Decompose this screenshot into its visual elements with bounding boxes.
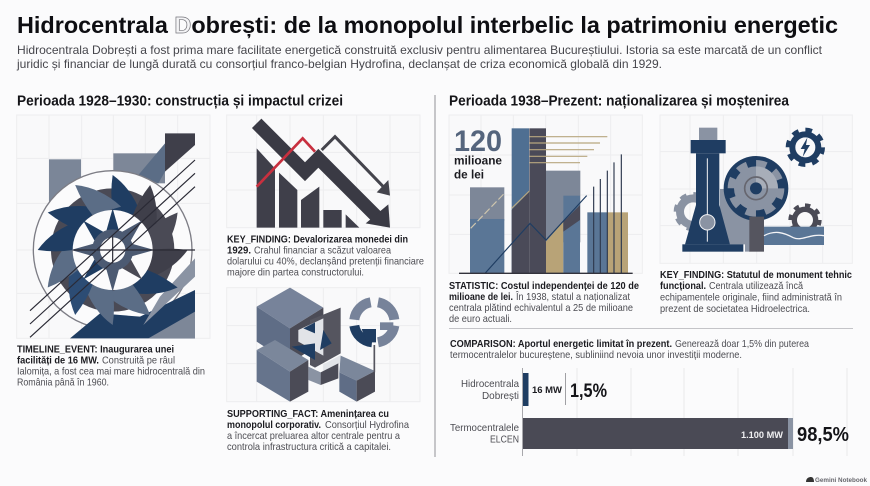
text: comparison: Generează doar 1,5% din puterea <box>675 339 809 350</box>
text: statistic: centrala plătind echivalentul a 25 de milioane <box>449 303 633 314</box>
panel: cost statistic chart: de lei <box>454 170 484 182</box>
bar: Dobrești: 16 MW <box>532 385 563 395</box>
text: supporting fact: controla infrastructura critică a capitalei. <box>227 442 391 453</box>
text: comparison <box>450 339 809 361</box>
bar labels: ELCEN <box>490 434 519 446</box>
panel: technical monument illustration <box>660 115 852 263</box>
heading: period 1928-1930: Perioada 1928–1930: construcția și impactul crizei <box>17 94 343 110</box>
text: supporting fact <box>227 409 409 453</box>
heading: period 1938-present: Perioada 1938–Prezent: naționalizarea și moștenirea <box>449 94 790 110</box>
text: key finding 1929: majore din partea constructorului. <box>227 268 364 278</box>
panel: cost statistic chart: milioane <box>454 156 502 168</box>
text: key finding monument: prezent de societatea Hidroelectrica. <box>660 304 810 315</box>
bar: Dobrești: 1,5% <box>570 380 607 402</box>
panel: cost statistic chart <box>449 115 642 273</box>
text: key finding 1929: Crahul financiar a scăzut valoarea <box>254 246 391 256</box>
text: key finding 1929: 1929. <box>227 246 251 256</box>
footer: Gemini Notebook badge: Gemini Notebook <box>815 477 867 484</box>
text: key finding 1929 <box>227 234 424 278</box>
bar chart: power comparison <box>450 368 849 456</box>
text: statistic <box>449 281 639 325</box>
text: statistic: STATISTIC: Costul independenței de 120 de <box>449 281 639 292</box>
bar: ELCEN: 1.100 MW <box>741 430 784 440</box>
text: statistic: de euro actuali. <box>449 314 512 325</box>
text: supporting fact: Consorțiul Hydrofina <box>325 420 409 431</box>
section divider <box>449 328 853 330</box>
text: timeline event <box>17 344 205 388</box>
bar labels: Termocentralele <box>450 422 519 434</box>
intro text: juridic și financiar de lungă durată cu consorțiul franco-belgian Hydrofina, declanșat de criza economică globală din 1929. <box>16 57 662 71</box>
text: key finding monument: funcțional. <box>660 281 706 292</box>
column divider <box>434 95 436 457</box>
text: statistic: În 1938, statul a naționalizat <box>515 290 630 303</box>
panel: water turbine illustration <box>17 115 210 338</box>
bar: Dobrești <box>523 373 607 406</box>
panel: corporate blocks illustration <box>227 288 420 402</box>
bar labels: Hidrocentrala <box>461 378 519 390</box>
bar: ELCEN: 98,5% <box>797 423 849 446</box>
panel: falling chart illustration <box>227 115 420 228</box>
intro text: Hidrocentrala Dobrești a fost prima mare facilitate energetică construită exclusiv pentru alimentarea Bucureștiului. Istoria sa este marcată de un conflict <box>17 43 823 57</box>
intro text <box>16 43 823 71</box>
text: supporting fact: SUPPORTING_FACT: Amenințarea cu <box>227 409 389 420</box>
title: Hidrocentrala Dobrești: de la monopolul interbelic la patrimoniu energetic <box>17 12 838 39</box>
text: supporting fact: monopolul corporativ. <box>227 420 321 431</box>
text: timeline event: TIMELINE_EVENT: Inaugurarea unei <box>17 344 174 356</box>
text: supporting fact: a încercat preluarea altor centrale pentru a <box>227 431 400 442</box>
text: key finding monument: echipamentele originale, fiind administrată în <box>660 292 842 304</box>
text: comparison: termocentralelor bucureștene, subliniind nevoia unor investiții moderne. <box>450 350 742 361</box>
text: key finding monument <box>660 270 852 315</box>
bar labels <box>450 378 519 446</box>
text: key finding monument: Centrala utilizează încă <box>709 281 803 292</box>
text: timeline event: România până în 1960. <box>17 378 109 388</box>
text: timeline event: Ialomița, a fost cea mai mare hidrocentrală din <box>17 366 205 378</box>
text: statistic: milioane de lei. <box>449 292 513 303</box>
text: key finding 1929: dolarului cu 40%, declanșând pretenții financiare <box>227 256 424 268</box>
text: timeline event: facilități de 16 MW. <box>17 356 99 366</box>
text: key finding 1929: KEY_FINDING: Devalorizarea monedei din <box>227 234 408 246</box>
text: comparison: COMPARISON: Aportul energetic limitat în prezent. <box>450 339 672 350</box>
text: timeline event: Construită pe râul <box>102 356 175 366</box>
bar: ELCEN <box>523 418 849 449</box>
panel: cost statistic chart: 120 <box>454 125 502 158</box>
bar labels: Dobrești <box>482 390 519 402</box>
